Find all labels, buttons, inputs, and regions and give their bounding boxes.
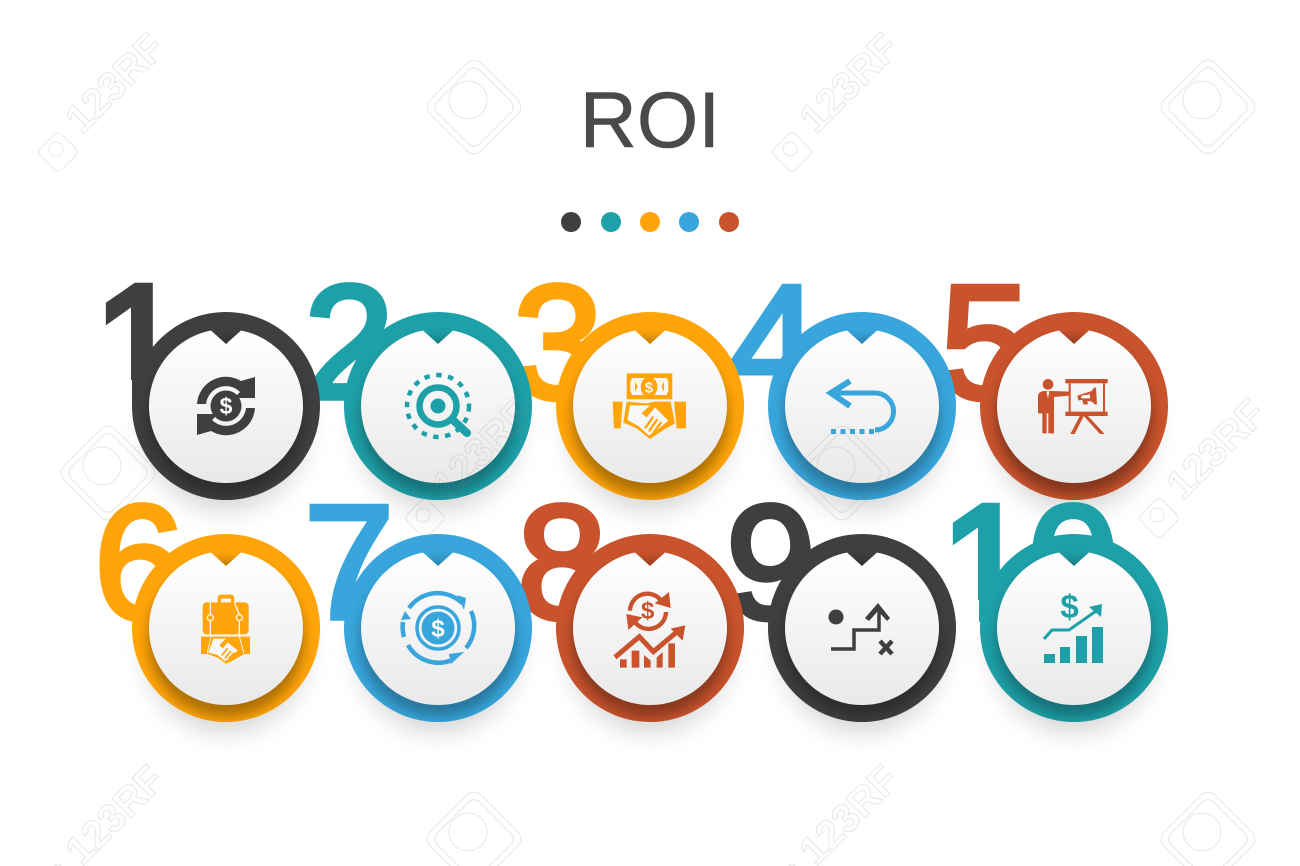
watermarks: 123RF: [424, 391, 540, 507]
icon: banknote over handshake: [613, 373, 686, 439]
icon: dollar, rising arrow and bars: [1044, 588, 1103, 663]
watermarks: 123RF: [57, 25, 173, 141]
icon: briefcase and handshake: [201, 595, 250, 664]
ring 4: [768, 312, 956, 500]
number 7: 7: [304, 472, 394, 653]
step 4: undo arrow: [731, 284, 956, 500]
number 8: 8: [517, 472, 607, 653]
step 7: dollar cycle: [310, 504, 532, 722]
watermarks: 123RF: [1158, 391, 1274, 507]
number 2: 2: [304, 252, 394, 433]
icon: return arrow: [831, 381, 894, 432]
step 9: stairs: [730, 502, 956, 722]
icon: coin with four circular arrows: [401, 593, 474, 664]
icon: magnifier with dashed circle: [407, 375, 469, 437]
ring 7: [344, 534, 532, 722]
icon: banknote over handshake: $: [645, 380, 653, 396]
icon: dollar cycle above rising chart: [615, 592, 685, 668]
icon: dollar with circular arrows: $: [220, 393, 233, 419]
number 3: 3: [513, 252, 603, 433]
step 10: growth chart: [952, 502, 1168, 722]
number 9: 9: [726, 472, 816, 653]
number 4: 4: [729, 252, 819, 433]
ring 1: [132, 312, 320, 500]
number 1: 1: [94, 252, 184, 433]
ring 5: [980, 312, 1168, 500]
ring 9: [768, 534, 956, 722]
watermarks: 123RF: [791, 25, 907, 141]
icon: dollar cycle above rising chart: $: [641, 598, 654, 625]
icon: presenter with board: [1038, 379, 1108, 434]
ring 8: [556, 534, 744, 722]
ring 6: [132, 534, 320, 722]
number 10: [952, 502, 1114, 622]
ring drop shadows: [146, 346, 1154, 732]
step 1: currency exchange: [106, 282, 320, 500]
step 5: presentation: [946, 284, 1168, 500]
step 6: briefcase handshake: [99, 502, 320, 722]
step 2: search: [310, 282, 532, 500]
legend dots: [561, 212, 739, 232]
icon: stairs with arrow and cross: [828, 603, 892, 654]
ring 10: [980, 534, 1168, 722]
number 6: 6: [94, 472, 184, 653]
icon: coin with four circular arrows: $: [431, 616, 445, 642]
number 10: 0: [1028, 472, 1118, 653]
number 5: 5: [940, 252, 1030, 433]
ring 2: [344, 312, 532, 500]
ring 3: [556, 312, 744, 500]
step 8: exchange and growth: [521, 502, 744, 722]
number 10: 1: [941, 472, 1031, 653]
icon: dollar with circular arrows: [197, 377, 255, 435]
title: ROI: [580, 75, 720, 164]
step 3: money handshake: [518, 282, 744, 500]
icon: dollar, rising arrow and bars: $: [1060, 588, 1079, 625]
